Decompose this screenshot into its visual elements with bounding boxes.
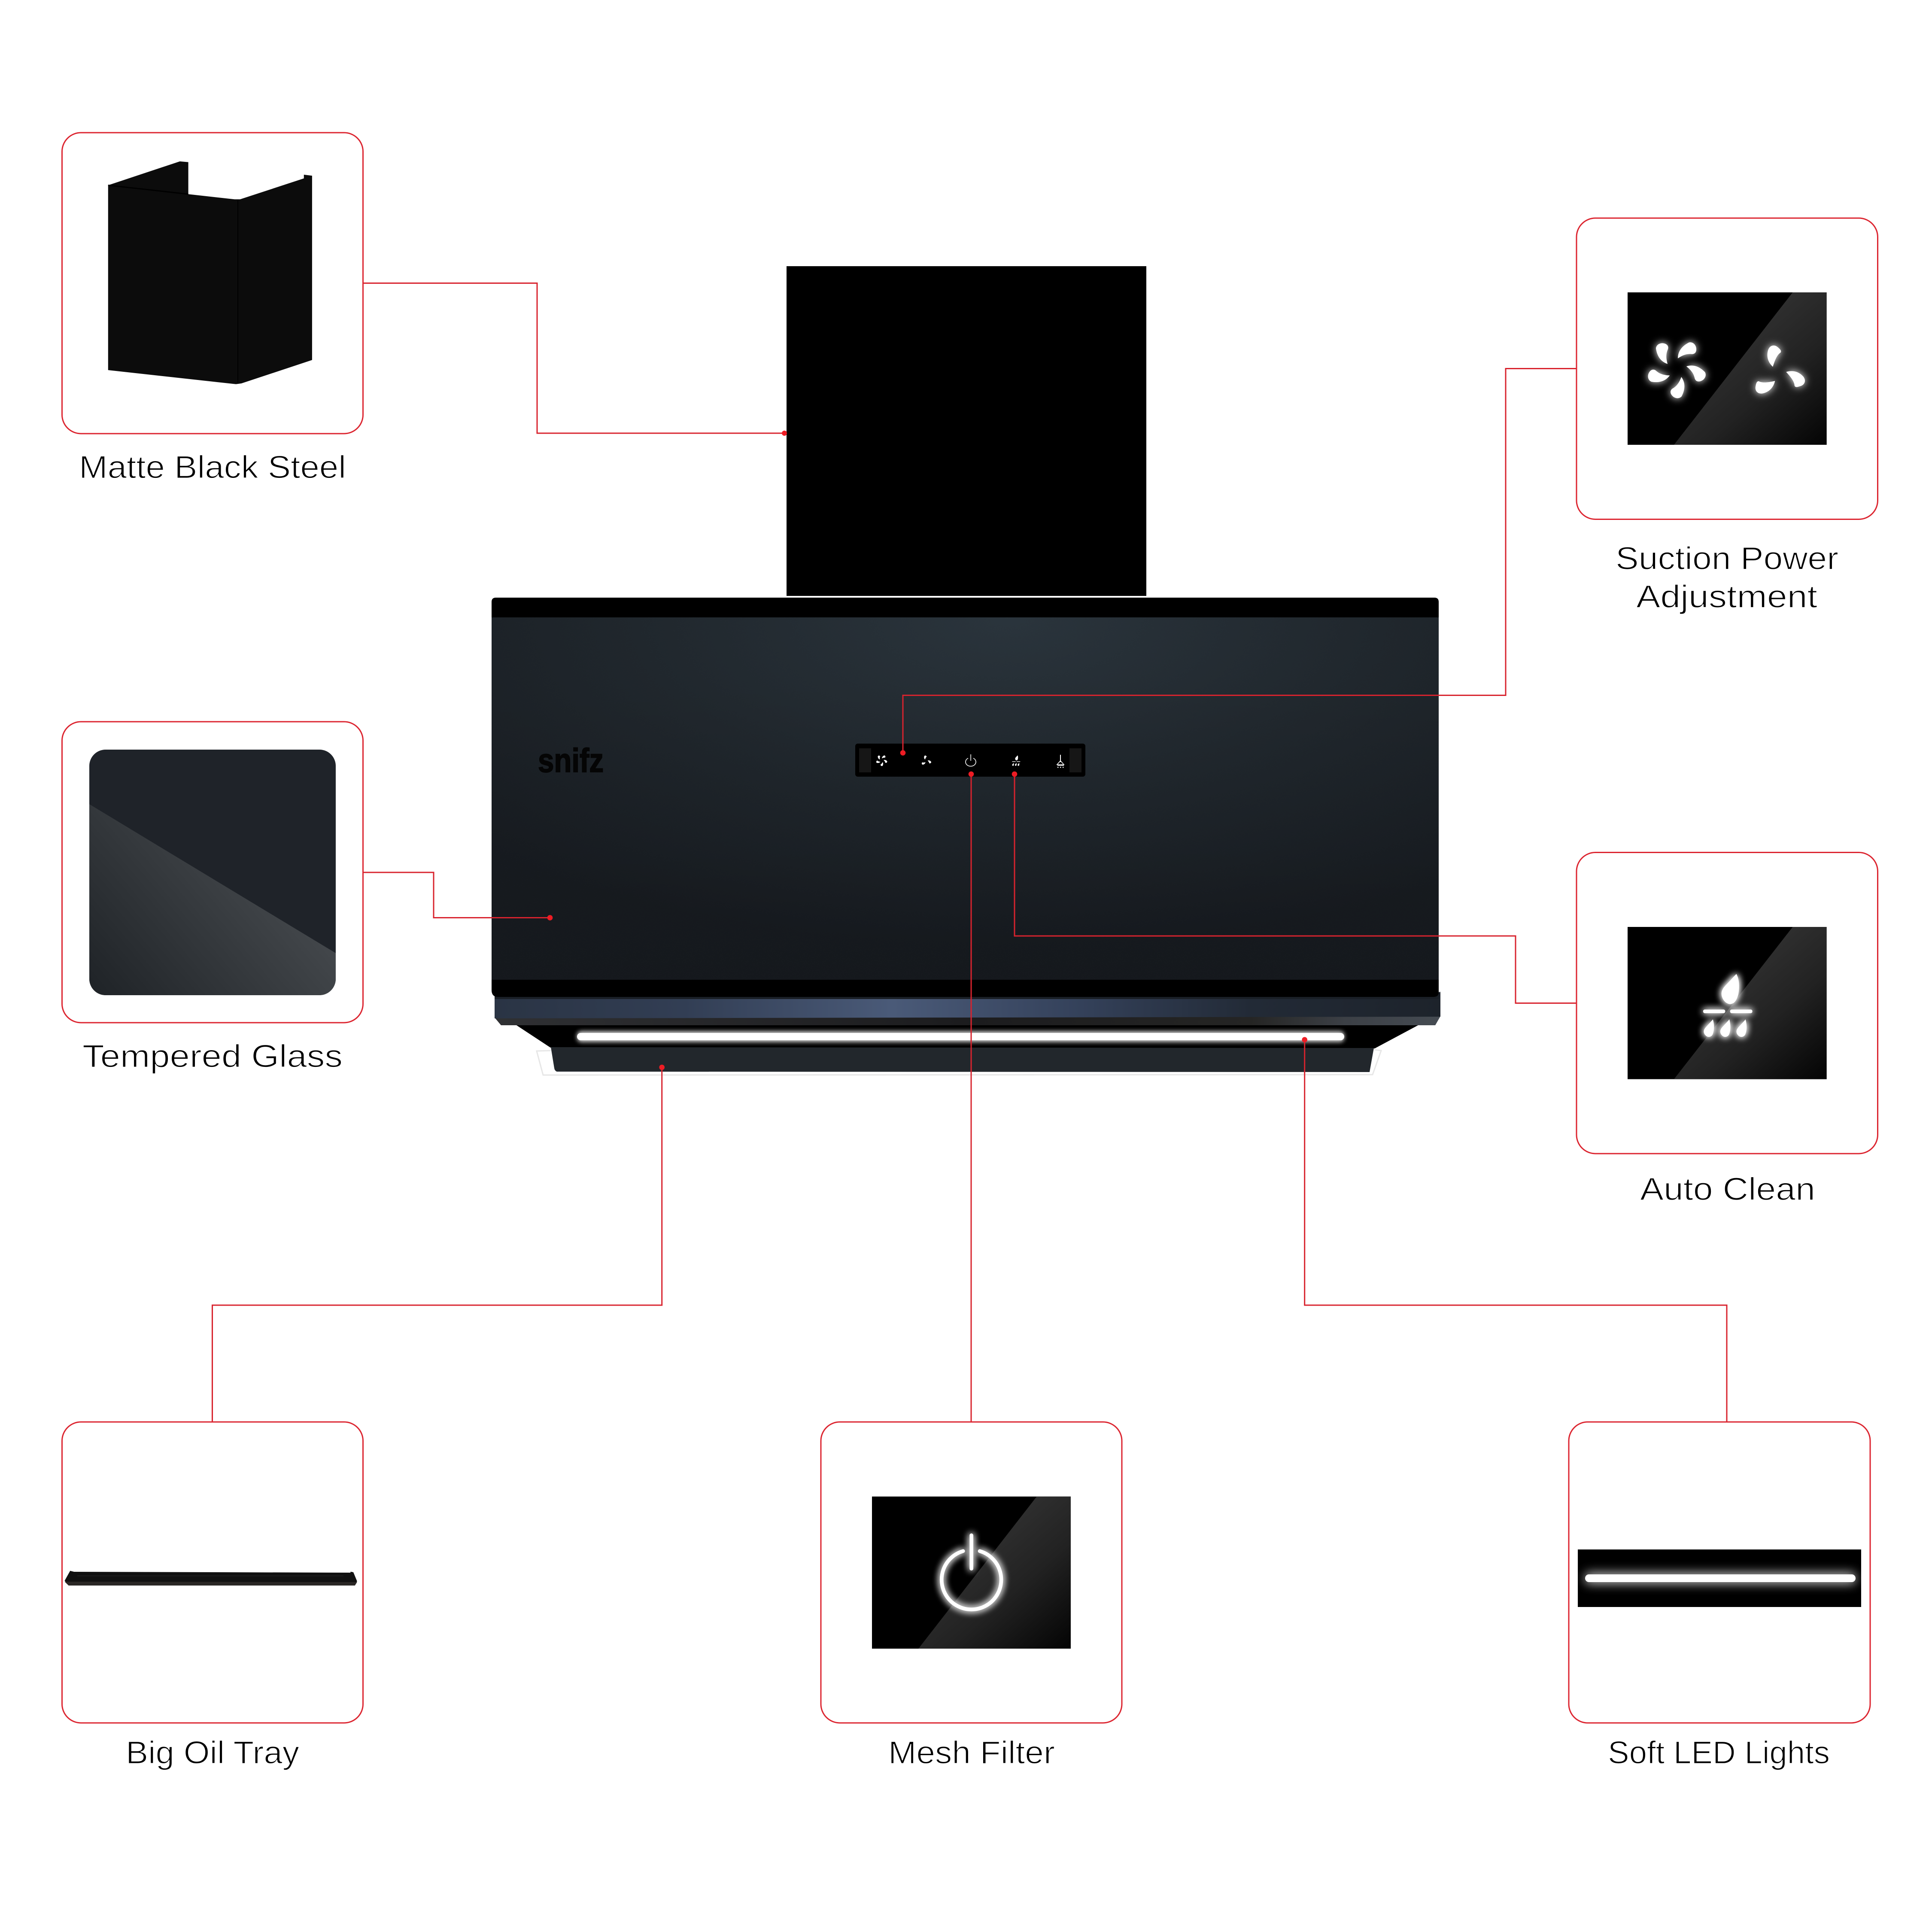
control panel bbox=[855, 744, 1085, 777]
connector: soft LED lights bbox=[1302, 1037, 1727, 1422]
connector: auto clean bbox=[1012, 772, 1577, 1003]
panel: soft LED lights bbox=[1569, 1422, 1870, 1771]
icon: five blade fan bbox=[1645, 341, 1707, 401]
hood lower trim bbox=[495, 992, 1440, 1025]
card frame bbox=[821, 1422, 1122, 1723]
tray outline bbox=[537, 1050, 1381, 1075]
card frame bbox=[62, 133, 363, 434]
callout lines and hot-spots bbox=[212, 283, 1727, 1422]
panel left block bbox=[859, 748, 871, 772]
glass grain bbox=[492, 617, 1439, 980]
LED glow bbox=[577, 1031, 1344, 1042]
card frame bbox=[62, 722, 363, 1023]
panel right block bbox=[1069, 748, 1081, 772]
icon: power tile bbox=[872, 1497, 1071, 1649]
connector: suction power bbox=[900, 368, 1577, 756]
label: Auto Clean bbox=[1640, 1171, 1815, 1207]
panel body bbox=[855, 744, 1085, 777]
label: Suction Power bbox=[1616, 541, 1838, 576]
panel: mesh filter bbox=[821, 1422, 1122, 1771]
panel: matte black steel bbox=[62, 133, 363, 485]
icon: chimney cover bbox=[108, 161, 312, 384]
icon: auto clean tile bbox=[1628, 927, 1827, 1079]
connector: big oil tray bbox=[212, 1065, 665, 1422]
panel: big oil tray bbox=[62, 1422, 363, 1771]
panel icon: auto clean bbox=[1012, 755, 1020, 766]
icon: three blade fan bbox=[1753, 346, 1807, 396]
connector: tempered glass bbox=[363, 872, 553, 920]
glass panel bbox=[492, 598, 1439, 997]
label: Big Oil Tray bbox=[126, 1735, 299, 1771]
chimney duct cover bbox=[787, 266, 1146, 596]
snifz logo: snifz bbox=[538, 741, 604, 779]
label: Soft LED Lights bbox=[1608, 1735, 1830, 1771]
product: chimney hood bbox=[492, 266, 1440, 1075]
panel icon: power bbox=[966, 754, 976, 766]
icon: droplets bbox=[1703, 974, 1753, 1037]
card frame bbox=[62, 1422, 363, 1723]
label: Tempered Glass bbox=[82, 1038, 343, 1074]
connector: mesh filter bbox=[969, 772, 974, 1422]
hood trim blue band bbox=[495, 993, 1440, 1018]
card frame bbox=[1577, 218, 1878, 519]
icon: oil tray bbox=[65, 1571, 357, 1586]
oil tray front bbox=[551, 1047, 1374, 1072]
card frame bbox=[1577, 853, 1878, 1154]
label: Mesh Filter bbox=[888, 1735, 1055, 1771]
label: Matte Black Steel bbox=[79, 449, 346, 485]
label: Adjustment bbox=[1636, 579, 1817, 614]
lower black body bbox=[516, 1025, 1418, 1048]
icon: LED tile bbox=[1578, 1549, 1861, 1607]
panel: tempered glass bbox=[62, 722, 363, 1074]
glass shading bbox=[492, 617, 1439, 980]
icon: glass swatch bbox=[89, 750, 336, 995]
panel icon: fan low bbox=[921, 756, 932, 765]
connector: matte black steel bbox=[363, 283, 787, 436]
label bbox=[1616, 541, 1838, 614]
trim dark top edge bbox=[495, 995, 1439, 999]
card frame bbox=[1569, 1422, 1870, 1723]
icon: fan tile bbox=[1628, 292, 1827, 445]
panel icon: fan high bbox=[876, 755, 887, 766]
panel: suction power adjustment bbox=[1577, 218, 1878, 614]
panel: auto clean bbox=[1577, 853, 1878, 1207]
panel icon: light bbox=[1057, 755, 1064, 768]
icon: power symbol bbox=[942, 1535, 1001, 1610]
glass surface bbox=[492, 617, 1439, 980]
LED light bar bbox=[577, 1033, 1344, 1040]
